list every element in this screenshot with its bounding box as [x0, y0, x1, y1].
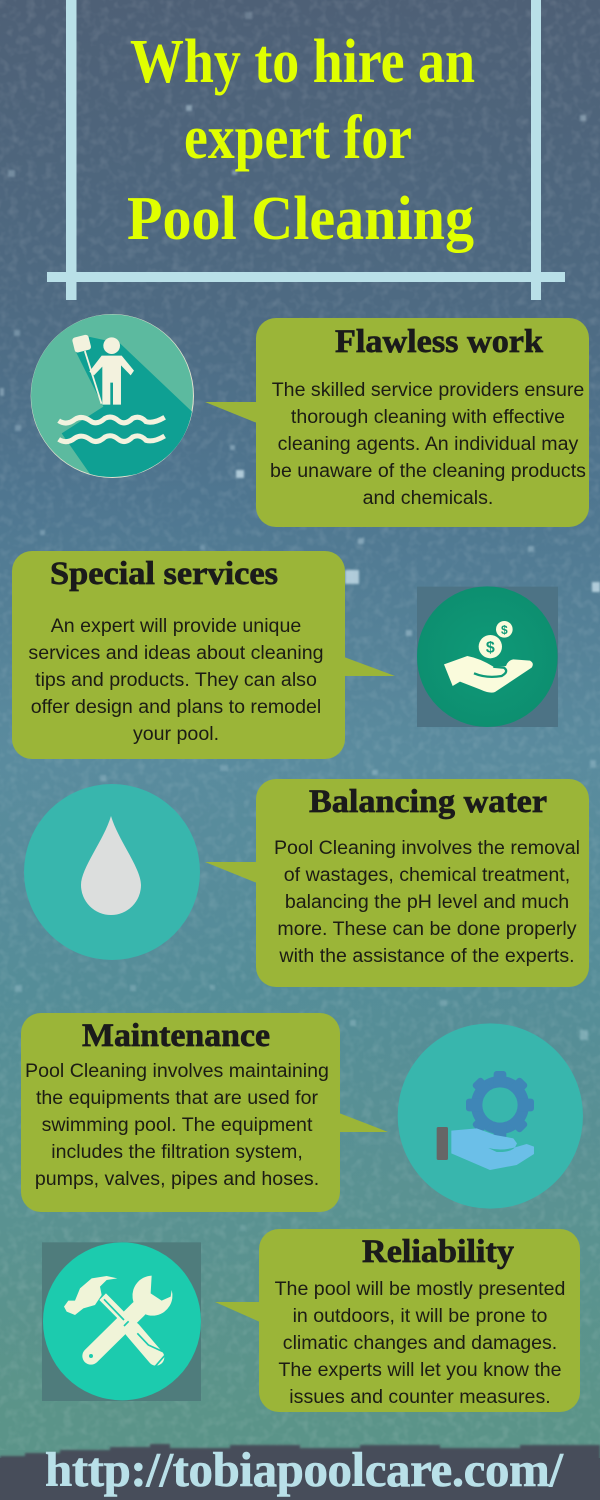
body text: pumps, valves, pipes and hoses. — [35, 1168, 319, 1190]
body text: Pool Cleaning involves the removal — [274, 837, 580, 859]
card — [21, 1013, 340, 1212]
body text — [28, 615, 324, 745]
body text: The skilled service providers ensure — [272, 379, 584, 401]
panel: reliability — [42, 1229, 580, 1412]
body text: The experts will let you know the — [278, 1359, 562, 1381]
body text: thorough cleaning with effective — [291, 406, 565, 428]
body text: services and ideas about cleaning — [28, 642, 324, 664]
body text: An expert will provide unique — [51, 615, 301, 637]
icon: water drop — [24, 784, 200, 960]
panel: maintenance — [21, 1013, 583, 1212]
body text — [25, 1060, 329, 1190]
body text: The pool will be mostly presented — [275, 1278, 565, 1300]
card — [12, 551, 345, 759]
body text: the equipments that are used for — [36, 1087, 319, 1109]
speech tail — [215, 1302, 260, 1322]
heading: Flawless work — [335, 324, 544, 360]
heading: Reliability — [362, 1234, 515, 1270]
body text: and chemicals. — [363, 487, 493, 509]
body text: more. These can be done properly — [277, 918, 577, 940]
body text: of wastages, chemical treatment, — [284, 864, 570, 886]
body text: swimming pool. The equipment — [42, 1114, 313, 1136]
body text: climatic changes and damages. — [283, 1332, 557, 1354]
body text: balancing the pH level and much — [285, 891, 569, 913]
title frame — [47, 0, 565, 300]
footer: dark treeline band — [0, 1444, 600, 1500]
heading: Maintenance — [82, 1018, 270, 1054]
body text: cleaning agents. An individual may — [278, 433, 579, 455]
card — [256, 779, 589, 987]
icon: pool cleaner in water — [31, 314, 194, 478]
heading: Special services — [50, 556, 278, 592]
speech tail — [205, 862, 257, 883]
body text — [270, 379, 586, 509]
card — [259, 1229, 580, 1412]
body text: issues and counter measures. — [289, 1386, 551, 1408]
icon: hand with coins — [417, 586, 558, 727]
body text: includes the filtration system, — [51, 1141, 303, 1163]
body text: be unaware of the cleaning products — [270, 460, 586, 482]
icon: hand with coins: $ — [501, 623, 508, 637]
icon: hammer and wrench — [42, 1242, 201, 1401]
body text: tips and products. They can also — [35, 669, 317, 691]
body text — [275, 1278, 565, 1408]
panel: balancing water — [24, 779, 589, 987]
footer url: http://tobiapoolcare.com/ — [45, 1442, 564, 1497]
body text: in outdoors, it will be prone to — [293, 1305, 548, 1327]
speech tail — [205, 402, 257, 423]
title — [127, 28, 475, 253]
speech tail — [339, 1113, 388, 1132]
heading: Balancing water — [309, 784, 547, 820]
body text: with the assistance of the experts. — [278, 945, 575, 967]
icon: hand with gear — [398, 1023, 583, 1209]
body text: offer design and plans to remodel — [31, 696, 321, 718]
body text: your pool. — [133, 723, 219, 745]
panel: flawless work — [31, 314, 589, 527]
card — [256, 318, 589, 527]
body text: Pool Cleaning involves maintaining — [25, 1060, 329, 1082]
title: Why to hire an — [130, 28, 475, 96]
icon: hand with coins: $ — [486, 639, 495, 656]
title: expert for — [184, 104, 412, 172]
body text — [274, 837, 580, 967]
speech tail — [344, 657, 395, 676]
title: Pool Cleaning — [127, 185, 474, 253]
panel: special services — [12, 551, 558, 759]
